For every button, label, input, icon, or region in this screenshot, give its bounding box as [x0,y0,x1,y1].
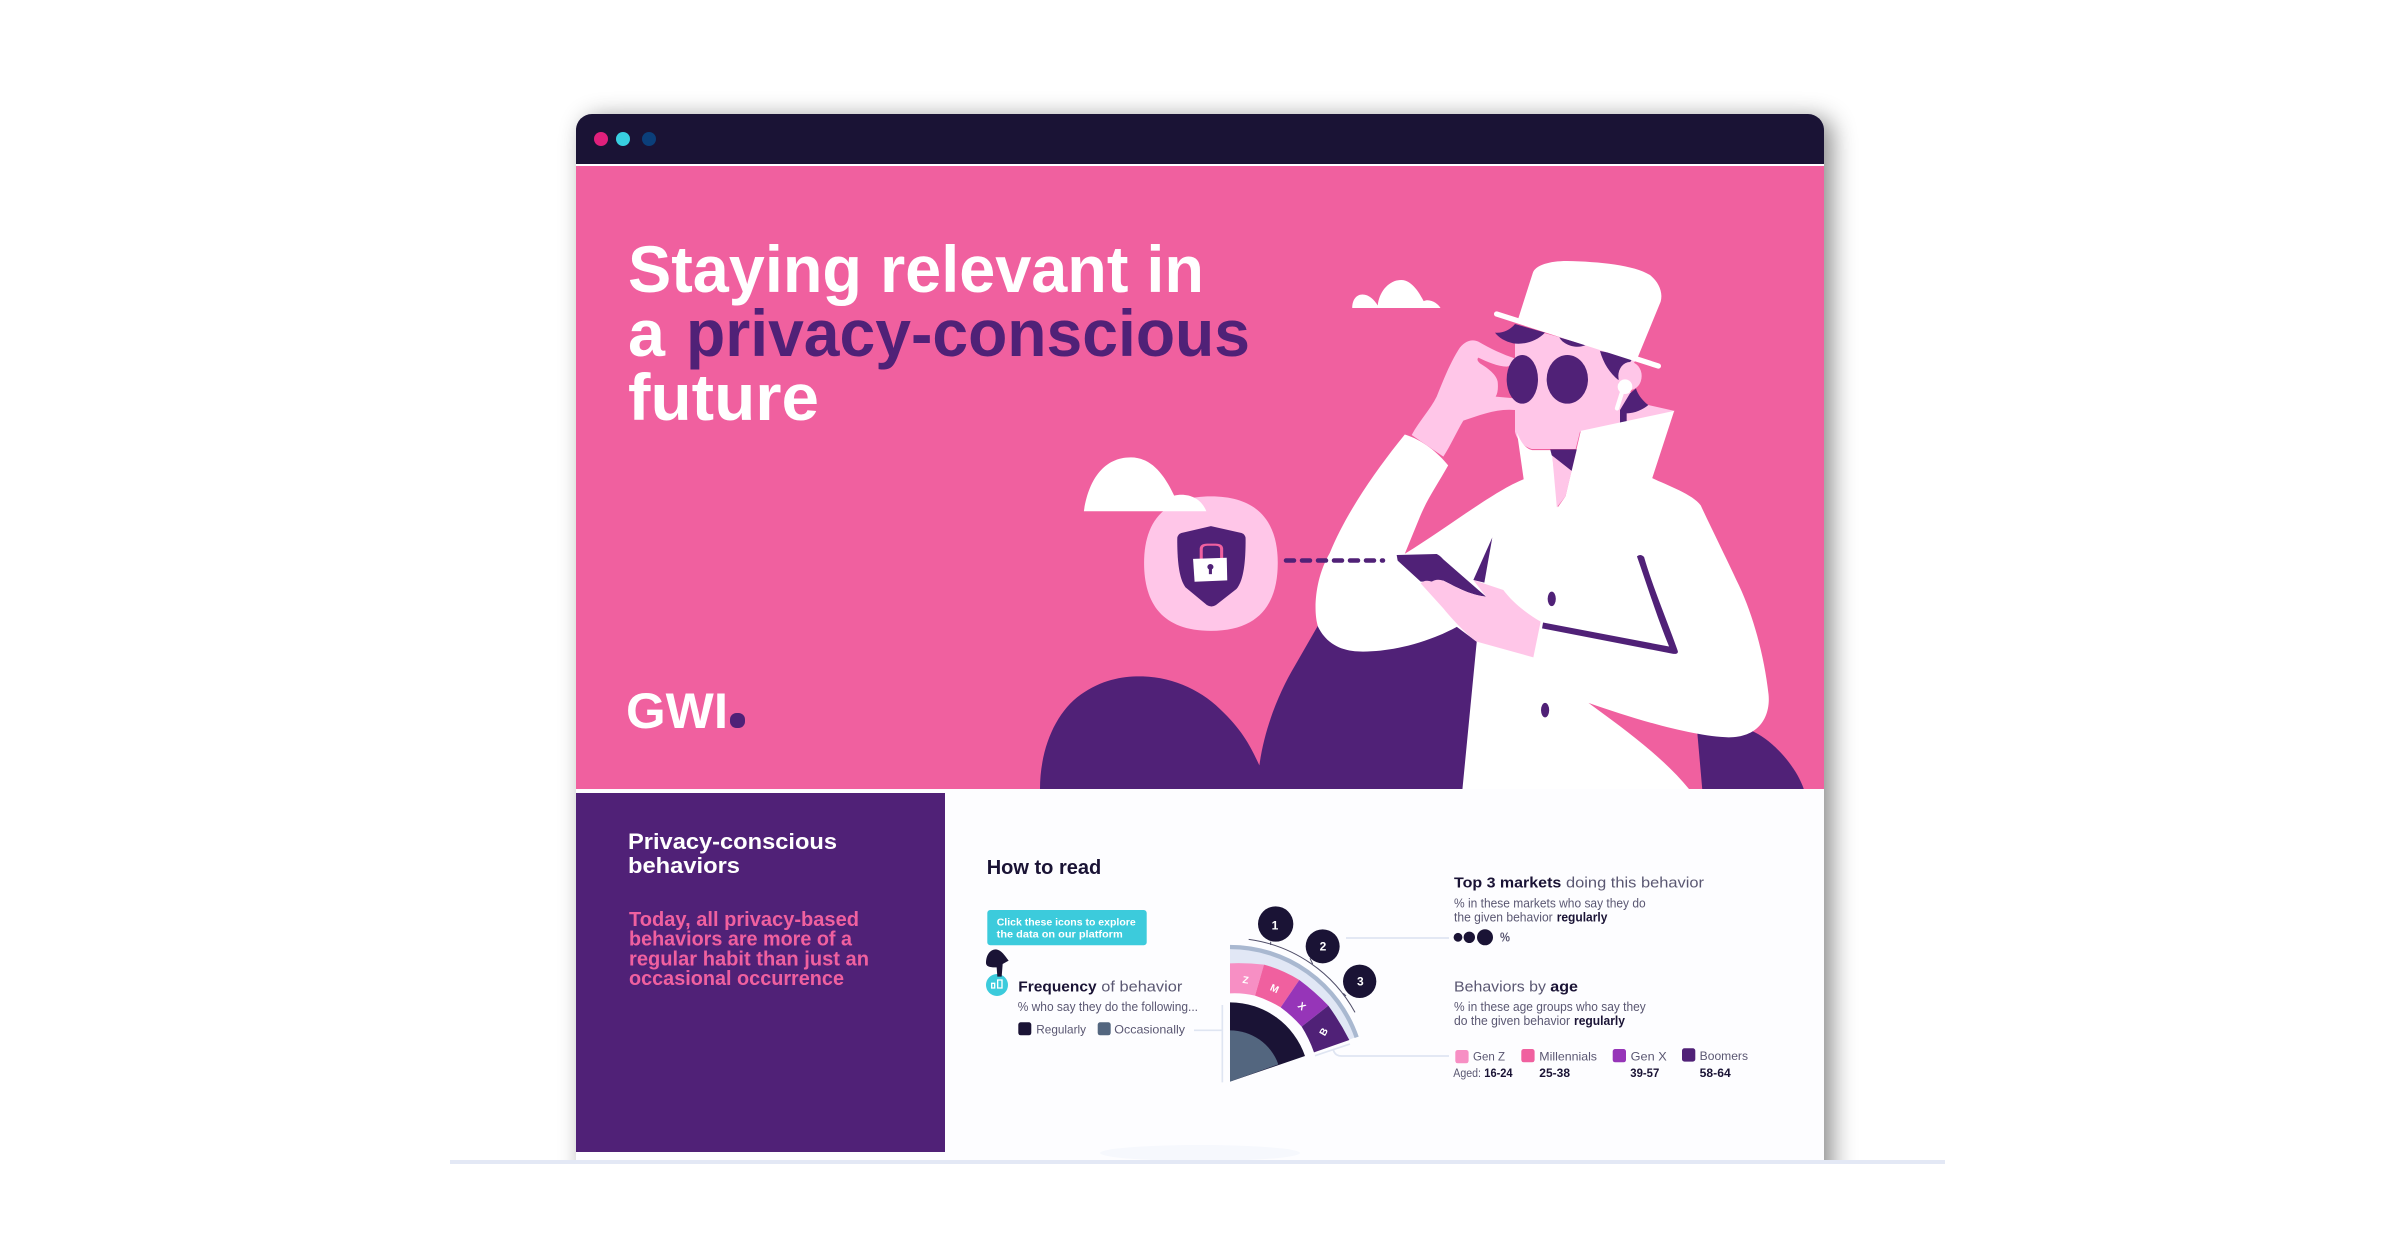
frequency description: % who say they do the following... [1018,1000,1198,1014]
age segments: Z [1242,975,1249,987]
behaviors by age heading: Behaviors by [1454,979,1547,996]
frequency legend: Occasionally [1114,1022,1185,1036]
age legend: Gen Z [1473,1050,1505,1064]
age segments [1230,963,1349,1052]
face [1515,325,1675,449]
title: privacy-conscious [686,296,1250,370]
behaviors by age description: do the given behavior [1454,1014,1570,1028]
panel body text: Today, all privacy-based [629,909,859,931]
age segments: M [1268,983,1280,996]
hat [1497,261,1661,366]
frequency legend [1018,1022,1185,1036]
frequency legend: Regularly [1036,1022,1086,1036]
market bubbles legend [1454,929,1510,945]
ear and earbud [1617,362,1642,408]
panel heading [628,829,837,878]
title: a [628,296,666,370]
panel body text: occasional occurrence [629,968,844,990]
head and raised hand [1412,261,1675,457]
callout: click these icons: Click these icons to explore [997,917,1136,929]
hand holding phone [1421,580,1541,657]
hair [1495,324,1648,423]
age legend: 16-24 [1484,1068,1513,1080]
fan chart diagram [1194,906,1449,1082]
numbered markers: 2 [1320,940,1327,954]
frequency wedge [1230,1002,1305,1082]
raised arm and hand [1412,340,1515,457]
numbered markers: 1 [1272,919,1279,933]
age legend: 58-64 [1700,1068,1731,1080]
icon: frequency button with pointing hand [986,949,1009,996]
numbered markers [1249,906,1376,1012]
phone and hand [1397,537,1541,657]
coat buttons [1541,592,1556,717]
browser title bar [576,114,1824,164]
small cloud [1352,280,1441,308]
white coat [1316,411,1769,789]
top 3 markets heading: doing this behavior [1566,875,1704,892]
age legend [1453,1048,1748,1080]
age legend: Gen X [1631,1050,1667,1064]
panel body text: regular habit than just an [629,948,869,970]
hills behind figure [1040,625,1804,789]
age legend: Millennials [1539,1050,1597,1064]
frequency of behavior heading [1018,979,1182,996]
top 3 markets description: the given behavior [1454,910,1553,924]
age segments: X [1295,1001,1308,1013]
large cloud [1084,457,1206,511]
panel heading: behaviors [628,853,740,878]
background scene [1040,280,1804,789]
numbered markers: 3 [1357,975,1364,989]
coat pocket [1542,555,1678,654]
behaviors by age heading [1454,979,1578,996]
age legend: Aged: [1453,1068,1481,1080]
age segments: B [1318,1026,1331,1038]
behaviors by age description: regularly [1574,1014,1625,1028]
leader lines [1194,938,1449,1082]
lapel fold [1473,537,1492,583]
behaviors by age heading: age [1550,979,1578,996]
sunglasses [1507,355,1588,404]
dashed connector [1286,558,1383,563]
age legend: 39-57 [1630,1068,1659,1080]
how to read heading: How to read [987,856,1101,879]
top 3 markets description: % in these markets who say they do [1454,896,1646,910]
market bubbles legend: % [1500,930,1510,944]
panel: privacy-conscious behaviors [576,793,945,1152]
top 3 markets heading [1454,875,1704,892]
callout: click these icons: the data on our platform [997,929,1123,941]
callout: click these icons [987,910,1147,945]
shield bubble [1144,496,1278,631]
panel body text [629,909,869,990]
outer band arc [1230,947,1357,1037]
top 3 markets description [1454,896,1646,924]
behaviors by age description: % in these age groups who say they [1454,1000,1646,1014]
shirt and tie [1550,449,1577,507]
title: Staying relevant in [628,232,1204,306]
illustration: detective with phone and privacy shield [1040,261,1804,789]
frequency of behavior heading: Frequency [1018,979,1097,996]
panel: pink hero background [576,166,1824,789]
GWI logo: GWI [626,683,728,739]
top 3 markets heading: Top 3 markets [1454,875,1561,892]
frequency of behavior heading: of behavior [1101,979,1182,996]
top 3 markets description: regularly [1557,910,1607,924]
phone [1397,554,1486,597]
title: future [628,360,819,434]
panel heading: Privacy-conscious [628,829,837,854]
behaviors by age description [1454,1000,1646,1028]
age legend: Boomers [1700,1049,1748,1063]
age legend: 25-38 [1539,1068,1571,1080]
title [628,232,1250,434]
coat and pocket [1316,411,1769,789]
panel body text: behaviors are more of a [629,929,853,951]
outer light band [1230,945,1357,1041]
